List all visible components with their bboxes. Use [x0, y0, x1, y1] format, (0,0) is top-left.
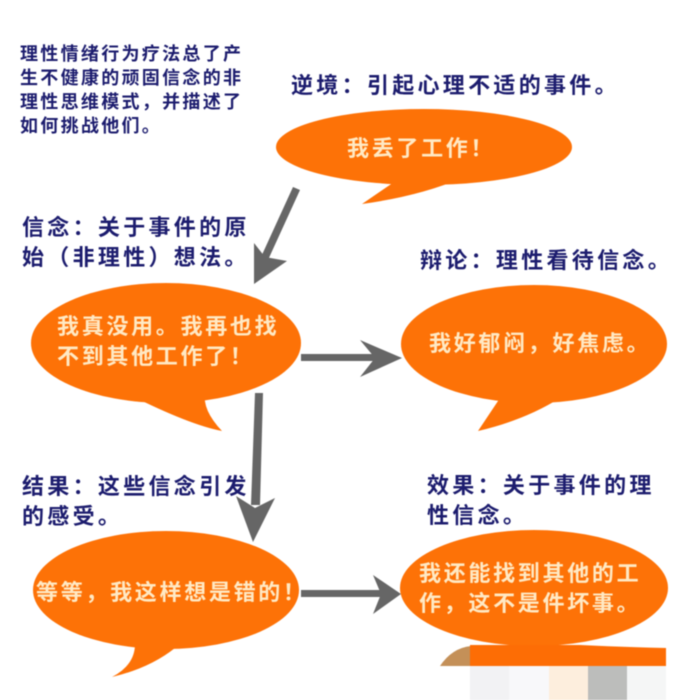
heading: consequence — [22, 474, 250, 529]
heading: consequence: 结果：这些信念引发 — [22, 474, 250, 499]
colour strip — [470, 666, 666, 700]
bubble: belief: 我真没用。我再也找 — [57, 314, 279, 339]
arrow: consequence to effect — [301, 575, 401, 614]
heading: effect — [427, 473, 655, 528]
heading: effect: 性信念。 — [427, 503, 528, 528]
intro text — [20, 43, 243, 136]
orange banner fragment — [440, 645, 666, 666]
heading: adversity: 逆境：引起心理不适的事件。 — [291, 73, 620, 98]
bubble: dispute: 我好郁闷，好焦虑。 — [429, 331, 651, 356]
bubble: consequence: 等等，我这样想是错的！ — [36, 580, 308, 605]
heading: dispute: 辩论：理性看待信念。 — [420, 248, 673, 273]
arrow: belief to dispute — [301, 340, 402, 377]
intro text: 理性情绪行为疗法总了产 — [20, 43, 243, 64]
bubble: belief: 不到其他工作了！ — [57, 344, 255, 369]
heading: belief: 始（非理性）想法。 — [22, 245, 250, 270]
bubble: consequence — [33, 531, 308, 677]
arrow: belief to consequence — [236, 393, 275, 542]
bubble: effect: 我还能找到其他的工 — [419, 561, 641, 586]
intro text: 如何挑战他们。 — [20, 116, 162, 136]
bubble: effect: 作，这不是件坏事。 — [419, 591, 641, 616]
bubble: belief — [31, 283, 301, 431]
intro text: 生不健康的顽固信念的非 — [20, 67, 243, 88]
heading: effect: 效果：关于事件的理 — [427, 473, 655, 498]
bubble: dispute — [401, 285, 667, 431]
bubble: adversity — [276, 109, 572, 204]
heading: belief: 信念：关于事件的原 — [22, 215, 250, 240]
intro text: 理性思维模式，并描述了 — [20, 91, 243, 112]
bubble: adversity: 我丢了工作！ — [347, 136, 495, 161]
arrow: adversity to belief — [254, 187, 300, 284]
heading: belief — [22, 215, 250, 270]
heading: consequence: 的感受。 — [22, 504, 123, 529]
bubble: effect — [400, 530, 668, 646]
